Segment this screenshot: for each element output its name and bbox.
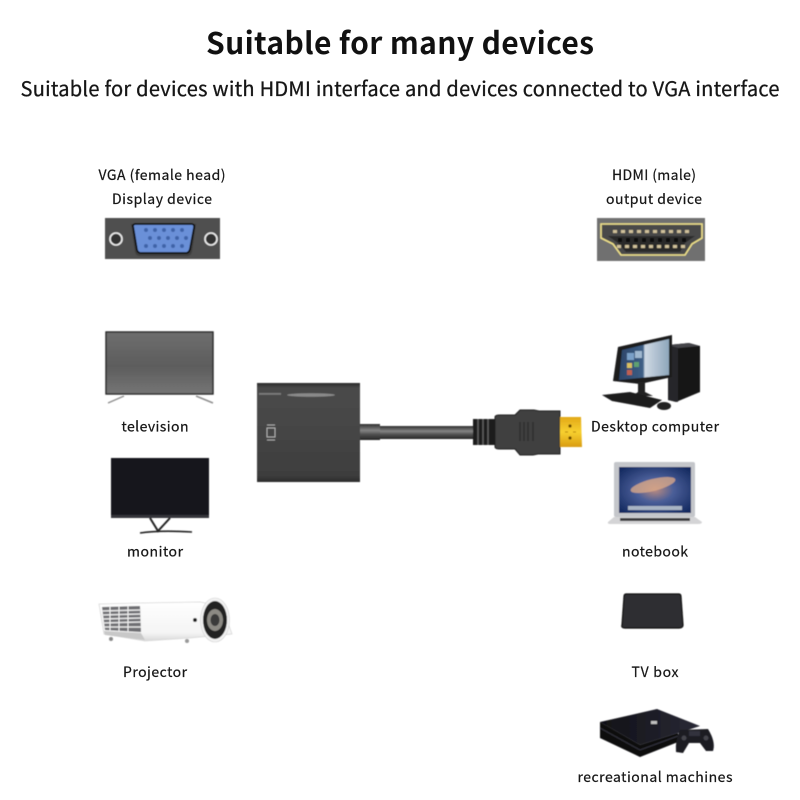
icon: game console <box>600 709 714 757</box>
icon: desktop computer <box>602 335 700 410</box>
HDMI heading: output device <box>606 189 702 209</box>
HDMI plug <box>473 410 582 455</box>
icon: HDMI port <box>597 218 705 261</box>
VGA heading <box>98 165 226 209</box>
icon: VGA port <box>105 218 220 259</box>
label: monitor: monitor <box>127 542 184 562</box>
VGA heading: VGA (female head) <box>98 165 226 185</box>
label: TV box: TV box <box>632 662 679 682</box>
HDMI heading: HDMI (male) <box>612 165 696 185</box>
title: Suitable for many devices <box>206 19 594 63</box>
adapter <box>257 383 582 482</box>
label: television: television <box>122 416 188 436</box>
adapter body <box>257 383 360 482</box>
cable <box>360 424 475 440</box>
icon: notebook <box>608 462 702 524</box>
VGA heading: Display device <box>112 189 212 209</box>
icon: television <box>106 332 213 403</box>
icon: TV box <box>622 594 683 628</box>
label: notebook: notebook <box>622 542 688 562</box>
HDMI heading <box>606 165 702 209</box>
icon: projector <box>99 598 232 643</box>
label: desktop computer: Desktop computer <box>591 416 720 436</box>
subtitle: Suitable for devices with HDMI interface and devices connected to VGA interface <box>20 73 780 102</box>
label: projector: Projector <box>123 662 188 682</box>
icon: monitor <box>111 458 209 533</box>
label: recreational machines: recreational machines <box>578 767 733 787</box>
